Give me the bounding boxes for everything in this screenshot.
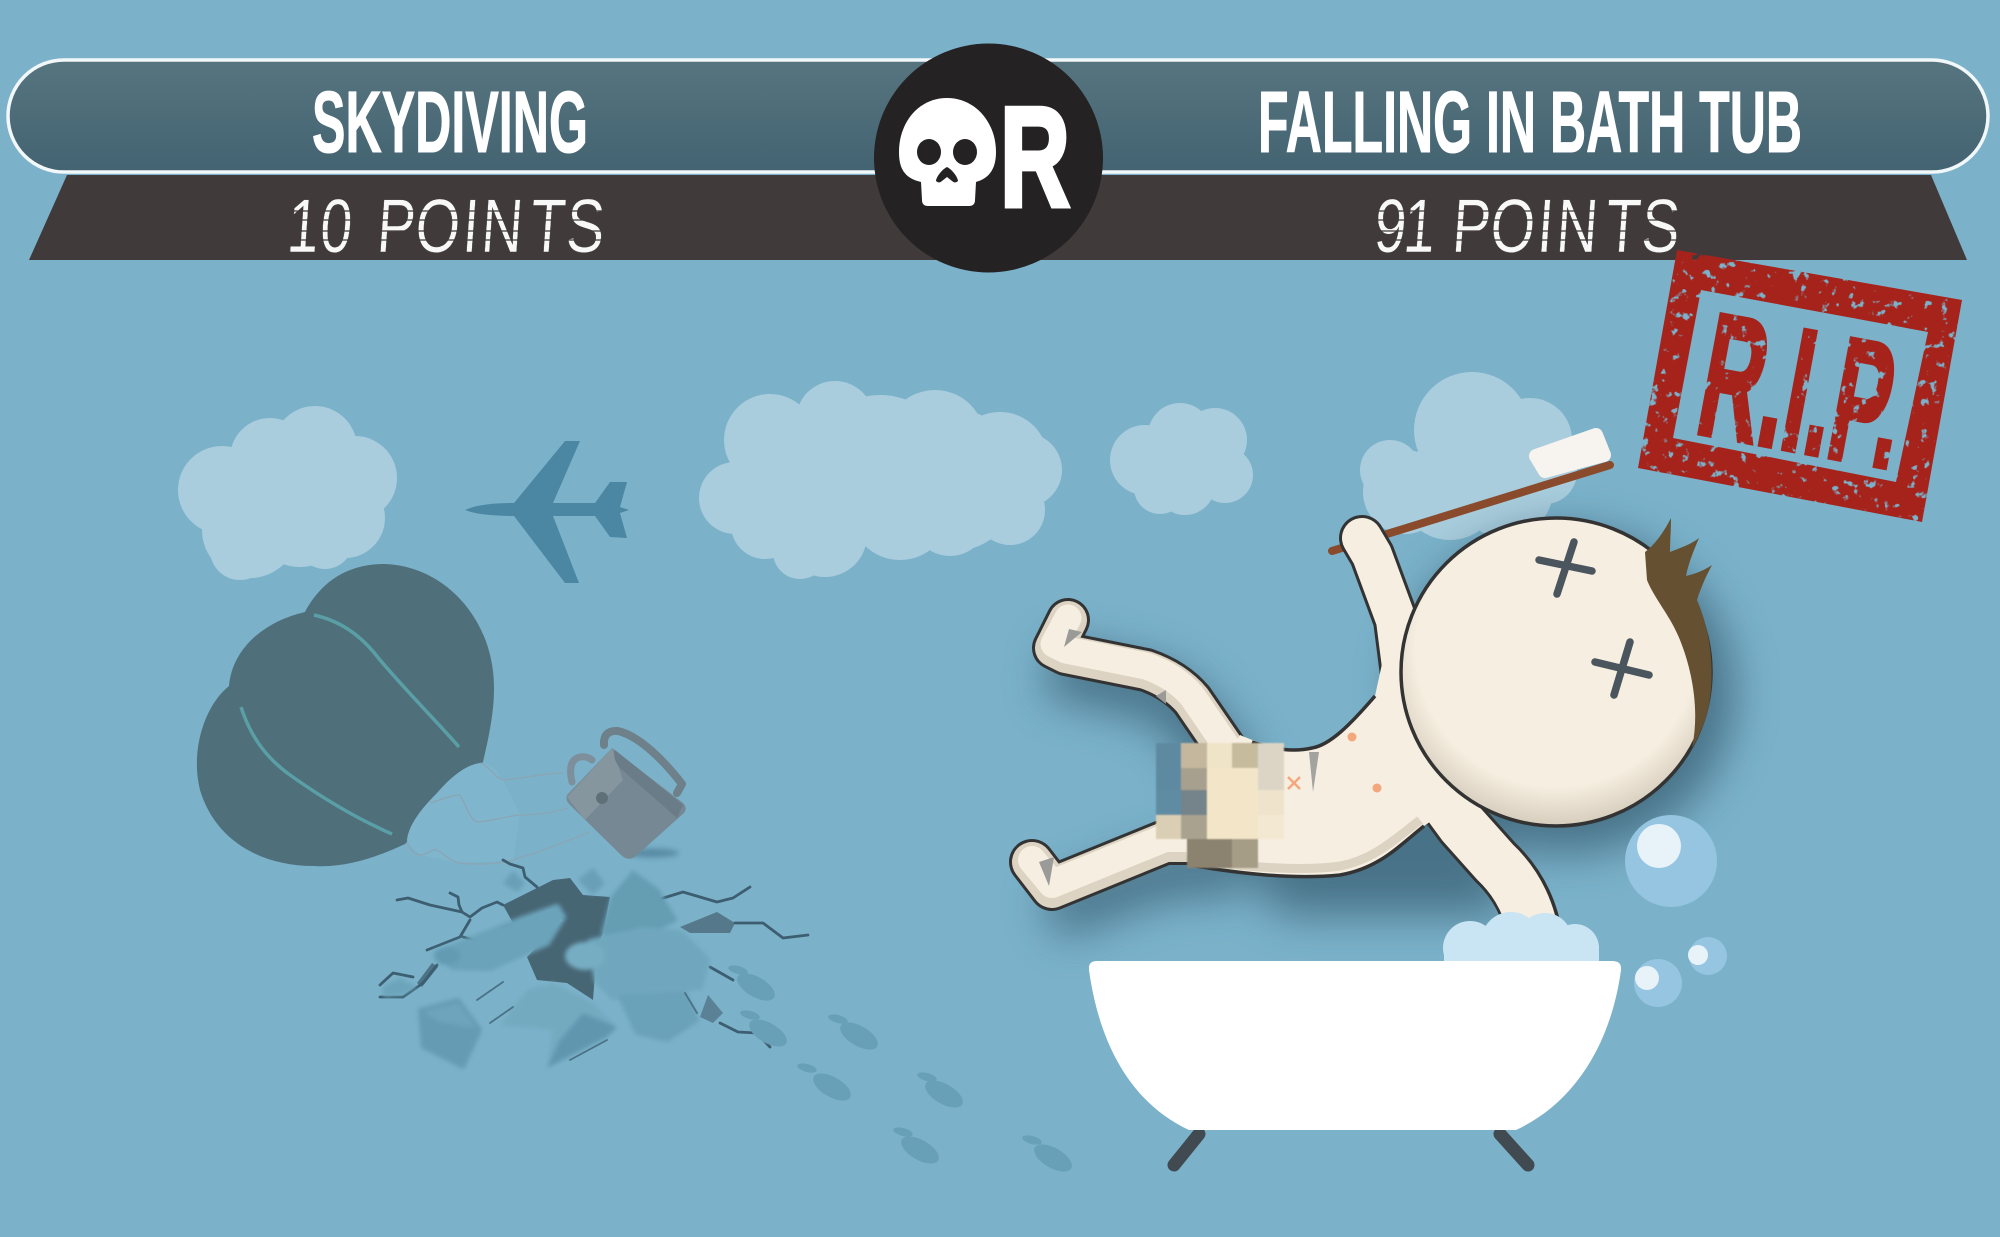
crater wedges: [417, 912, 735, 1023]
torso: [1180, 610, 1490, 877]
eye: cross 1: [1539, 542, 1592, 594]
toothbrush: [1332, 435, 1610, 551]
parachute canopy: [197, 564, 494, 866]
cloud 3: [1110, 403, 1253, 515]
supporting arm: [1440, 795, 1536, 948]
letter R: R: [1000, 78, 1070, 237]
crater hole: [503, 878, 610, 1000]
heading: skydiving: SKYDIVING: [312, 74, 588, 171]
hair: [1645, 518, 1712, 748]
figure: [1032, 518, 1712, 948]
censor mosaic: [1156, 743, 1284, 868]
bubbles: [1625, 815, 1727, 1007]
cloud 4: [1360, 372, 1577, 540]
parachute scene: [197, 564, 1076, 1177]
foam: [1443, 912, 1599, 975]
chest details: [1288, 732, 1382, 792]
header banner: [8, 44, 1988, 272]
upper leg: [1054, 618, 1240, 770]
score: 91 points: 91 POINTS: [1372, 184, 1683, 269]
icon: airplane: [465, 441, 629, 583]
toothbrush handle: [1332, 465, 1610, 551]
rubble: [382, 870, 707, 1068]
footprints: [727, 964, 1076, 1177]
bath tub: [1089, 912, 1621, 1165]
icon: bucket: [566, 731, 686, 859]
title bar: [8, 60, 1988, 172]
parachute skirt and lines: [407, 763, 590, 864]
cracks: [380, 860, 808, 1047]
or badge: [874, 44, 1103, 272]
icon: skull standing in for the letter O: [899, 98, 996, 206]
fine fissures: [477, 982, 697, 1060]
lower leg: [1032, 838, 1240, 888]
toothbrush bristles: [1536, 435, 1604, 471]
stamp: R.I.P.: [1638, 250, 1962, 522]
cloud 1: [178, 406, 397, 580]
cloud 2: [699, 381, 1062, 579]
bucket body: [566, 748, 686, 859]
score strip: [29, 175, 1967, 260]
bucket handle: [604, 731, 682, 793]
head: [1401, 518, 1712, 826]
eye: cross 2: [1595, 642, 1649, 695]
figure shadow: [1050, 530, 1734, 915]
raised arm: [1362, 538, 1405, 690]
tub body: [1089, 961, 1621, 1130]
tub legs: [1174, 1134, 1528, 1165]
score: 10 points: 10 POINTS: [285, 184, 608, 269]
ground crater: [380, 860, 808, 1068]
shadow under bucket: [627, 848, 679, 858]
